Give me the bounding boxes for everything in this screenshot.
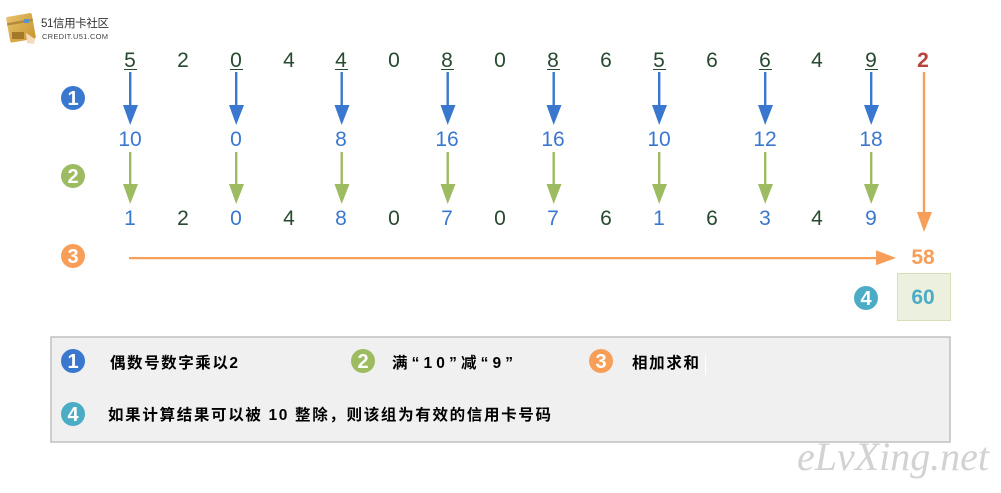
blue arrows: step 1 (123, 72, 879, 125)
row: doubled digits: 10 (118, 128, 142, 151)
row: reduced digits: 8 (335, 207, 347, 230)
row: doubled digits: 10 (647, 128, 671, 151)
row: original card digits: 5 (124, 49, 136, 72)
badge 3: 3 (67, 246, 79, 268)
row: reduced digits: 1 (653, 207, 665, 230)
orange arrow: sum (129, 250, 896, 265)
badge 1 (61, 86, 85, 110)
row: reduced digits: 0 (230, 207, 242, 230)
logo url: CREDIT.U51.COM (42, 32, 108, 41)
logo name: 51信用卡社区 (41, 16, 109, 30)
result box: 60 (911, 286, 935, 309)
legend text 2: 满“10”减“9” (392, 354, 513, 372)
legend badge 1: 1 (67, 351, 79, 373)
badge 4 (854, 286, 878, 310)
row: original card digits (124, 49, 929, 72)
row: original card digits: 5 (653, 49, 665, 72)
badge 2 (61, 164, 85, 188)
result box (898, 274, 950, 320)
row: reduced digits: 4 (283, 207, 295, 230)
row: reduced digits (124, 207, 877, 230)
row: original card digits: 6 (600, 49, 612, 72)
legend badge 3: 3 (595, 351, 607, 373)
row: reduced digits: 2 (177, 207, 189, 230)
row: original card digits: 0 (230, 49, 242, 72)
row: original card digits: 0 (494, 49, 506, 72)
badge 2: 2 (67, 166, 79, 188)
row: reduced digits: 4 (811, 207, 823, 230)
legend badge 2 (351, 349, 375, 373)
panel: legend (51, 337, 950, 442)
icon: credit card logo (6, 13, 36, 44)
green arrows: step 2 (123, 152, 879, 204)
row: doubled digits: 12 (753, 128, 777, 151)
sum value: 58 (911, 246, 935, 269)
row: reduced digits: 1 (124, 207, 136, 230)
row: doubled digits: 16 (541, 128, 565, 151)
row: original card digits: 0 (388, 49, 400, 72)
legend badge 3 (589, 349, 613, 373)
row: reduced digits: 7 (547, 207, 559, 230)
watermark: eLvXing.net (797, 434, 990, 479)
row: doubled digits: 8 (335, 128, 347, 151)
legend badge 4: 4 (67, 404, 79, 426)
legend text 1: 偶数号数字乘以2 (110, 353, 238, 372)
row: reduced digits: 7 (441, 207, 453, 230)
row: original card digits: 4 (811, 49, 823, 72)
badge 3 (61, 244, 85, 268)
row: reduced digits: 3 (759, 207, 771, 230)
logo (6, 13, 109, 44)
row: original card digits: 4 (283, 49, 295, 72)
row: original card digits: 6 (706, 49, 718, 72)
badge 4: 4 (860, 288, 872, 310)
row: original card digits: 4 (335, 49, 347, 72)
legend badge 2: 2 (357, 351, 369, 373)
legend text 4: 如果计算结果可以被 10 整除，则该组为有效的信用卡号码 (108, 405, 551, 424)
legend badge 4 (61, 402, 85, 426)
digit underlines (124, 69, 878, 70)
row: original card digits: 2 (177, 49, 189, 72)
row: doubled digits (118, 128, 883, 151)
orange arrow: check digit down (917, 72, 932, 232)
legend badge 1 (61, 349, 85, 373)
badge 1: 1 (67, 88, 79, 110)
row: original card digits: 6 (759, 49, 771, 72)
row: doubled digits: 18 (859, 128, 883, 151)
row: original card digits: 9 (865, 49, 877, 72)
row: original card digits: 8 (441, 49, 453, 72)
row: reduced digits: 6 (600, 207, 612, 230)
row: reduced digits: 0 (494, 207, 506, 230)
row: original card digits: 8 (547, 49, 559, 72)
row: reduced digits: 9 (865, 207, 877, 230)
row: reduced digits: 6 (706, 207, 718, 230)
legend text 3: 相加求和 (632, 354, 699, 372)
row: reduced digits: 0 (388, 207, 400, 230)
row: original card digits: 2 (917, 49, 929, 72)
row: doubled digits: 16 (435, 128, 459, 151)
row: doubled digits: 0 (230, 128, 242, 151)
